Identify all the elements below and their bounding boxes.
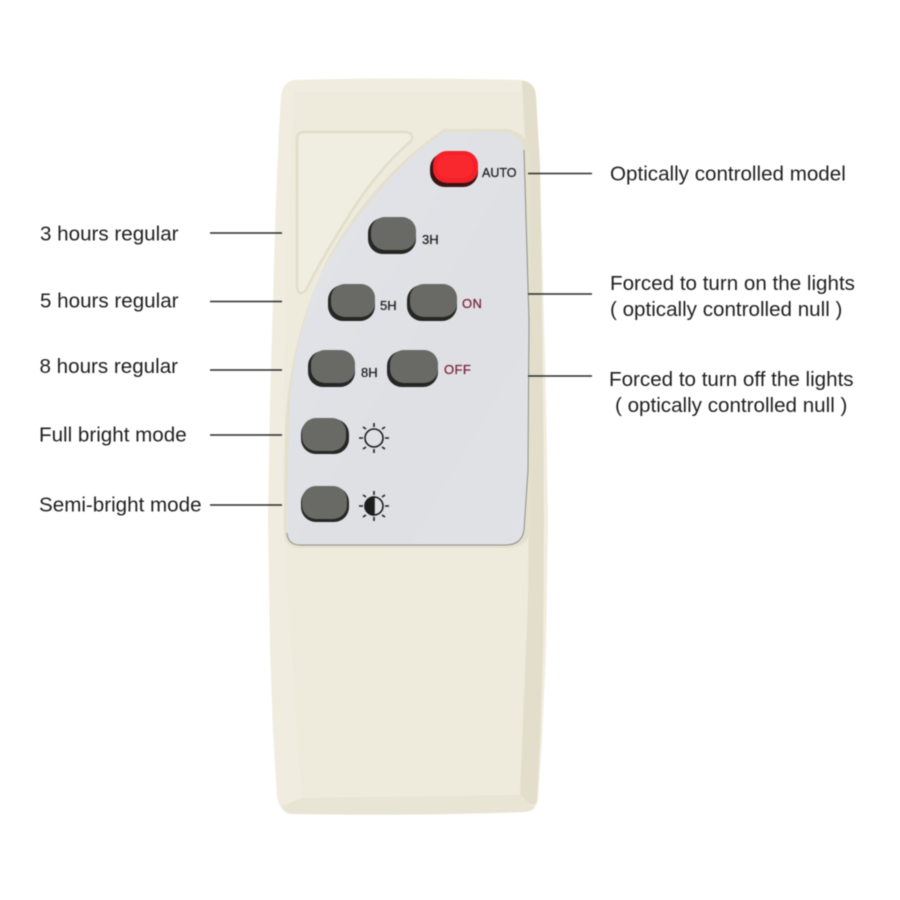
label: forced on: [528, 272, 855, 321]
panel shadow edge: [287, 150, 529, 545]
button: full bright: [301, 418, 349, 454]
remote control body: [268, 78, 548, 815]
button: 8H: [308, 350, 378, 387]
label: full bright mode: Full bright mode: [39, 424, 187, 446]
button: 5H: 5H: [380, 298, 397, 313]
label: 5 hours regular: 5 hours regular: [40, 290, 179, 312]
button: 3H: [368, 217, 439, 254]
bottom edge: [282, 795, 535, 815]
button: ON: [407, 284, 482, 321]
battery cover recess: [297, 132, 412, 293]
button: 5H: [328, 284, 397, 321]
button: ON: ON: [462, 296, 482, 311]
button: 3H: 3H: [422, 232, 439, 247]
label: 8 hours regular: 8 hours regular: [40, 355, 178, 378]
label: forced off: Forced to turn off the lights: [609, 368, 854, 391]
label: 3 hours regular: 3 hours regular: [40, 222, 179, 246]
button: auto: [430, 151, 517, 187]
right side shaded band: [520, 81, 544, 805]
control panel: [287, 132, 529, 545]
label: forced off: [528, 368, 854, 417]
button: OFF: [387, 350, 471, 387]
label: forced off: ( optically controlled null ): [615, 394, 847, 417]
button: auto: AUTO: [482, 166, 517, 180]
label: forced on: Forced to turn on the lights: [610, 272, 855, 295]
icon: half sun: [359, 491, 389, 521]
main face: [283, 92, 531, 798]
icon: sun outline: [359, 423, 389, 453]
button: 8H: 8H: [361, 365, 378, 380]
label: forced on: ( optically controlled null ): [610, 298, 842, 321]
panel bevel: [284, 129, 531, 548]
label: optically controlled model: Optically controlled model: [610, 162, 846, 186]
button: semi bright: [301, 486, 349, 522]
label: semi-bright mode: Semi-bright mode: [39, 494, 202, 516]
button: OFF: OFF: [444, 362, 471, 377]
